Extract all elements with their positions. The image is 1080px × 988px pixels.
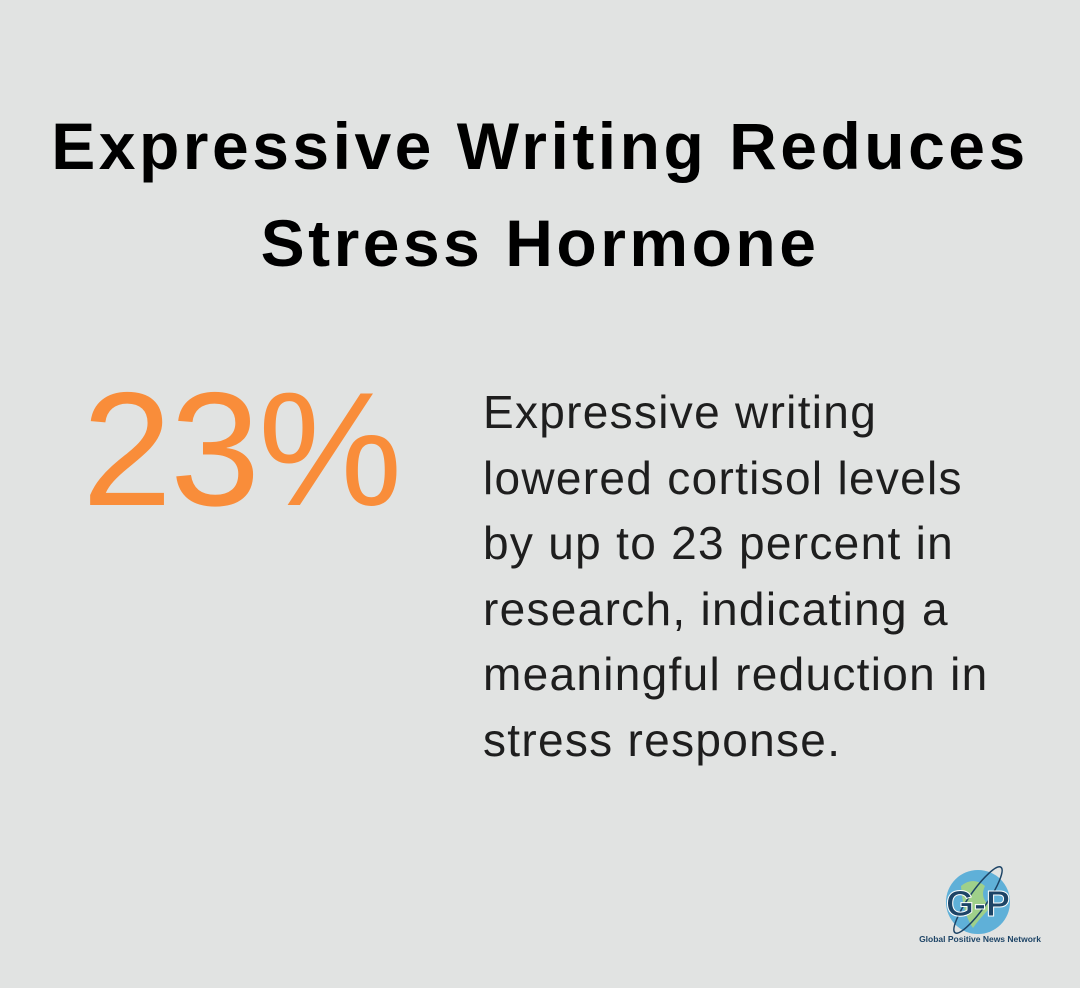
logo: [919, 866, 1041, 944]
description text: research, indicating a: [483, 582, 949, 634]
description text: meaningful reduction in: [483, 648, 989, 700]
title: [51, 109, 1029, 280]
description text: [483, 386, 989, 766]
description text: stress response.: [483, 714, 841, 766]
big stat: 23%: [82, 359, 400, 540]
description text: Expressive writing: [483, 386, 877, 438]
description text: lowered cortisol levels: [483, 452, 963, 504]
logo: Global Positive News Network: [919, 934, 1041, 944]
description text: by up to 23 percent in: [483, 517, 954, 569]
title: Stress Hormone: [261, 206, 819, 280]
title: Expressive Writing Reduces: [51, 109, 1029, 183]
logo: G-P: [946, 883, 1010, 924]
